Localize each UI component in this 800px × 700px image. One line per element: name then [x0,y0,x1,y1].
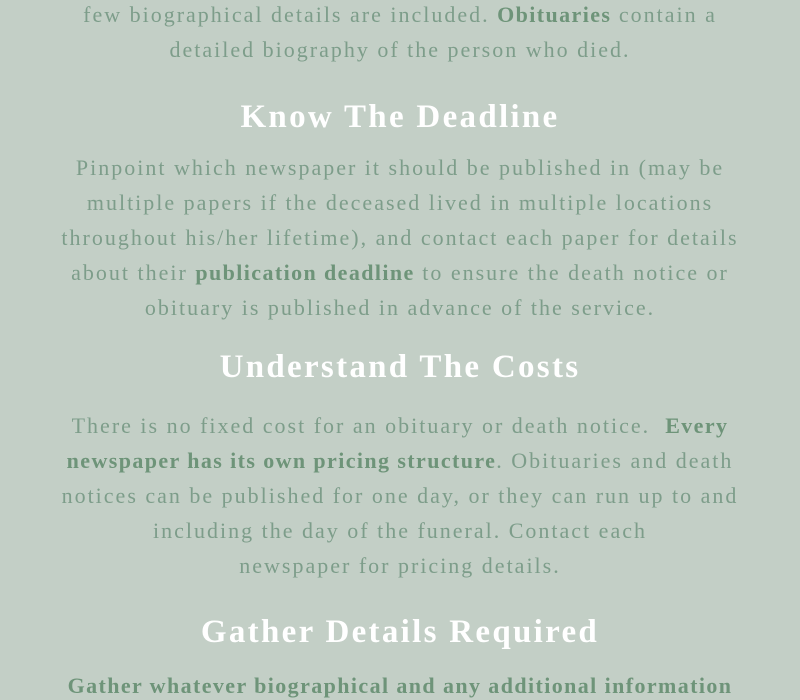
text block: costs: There is no fixed cost for an obituary or death notice. Every [72,413,728,438]
text block: intro [83,2,717,62]
text block: costs: including the day of the funeral. Contact each [153,518,647,543]
text block: intro: few biographical details are included. Obituaries contain a [83,2,717,27]
text block: costs: newspaper for pricing details. [239,553,561,578]
text block: costs: notices can be published for one day, or they can run up to and [62,483,738,508]
heading: know the deadline: Know The Deadline [240,99,560,135]
heading: gather details required: Gather Details Required [201,614,599,650]
text block: deadline: about their publication deadline to ensure the death notice or [71,260,729,285]
text block: deadline: obituary is published in advance of the service. [145,295,655,320]
text block: gather: Gather whatever biographical and any additional information [68,673,732,698]
text block: costs [62,413,738,578]
text block: intro: detailed biography of the person who died. [170,37,630,62]
text block: costs: newspaper has its own pricing structure. Obituaries and death [67,448,733,473]
text block: deadline: multiple papers if the deceased lived in multiple locations [87,190,713,215]
text block: deadline [61,155,739,320]
heading: understand the costs: Understand The Costs [220,349,580,385]
text block: deadline: Pinpoint which newspaper it should be published in (may be [76,155,724,180]
text block: deadline: throughout his/her lifetime), and contact each paper for details [61,225,739,250]
